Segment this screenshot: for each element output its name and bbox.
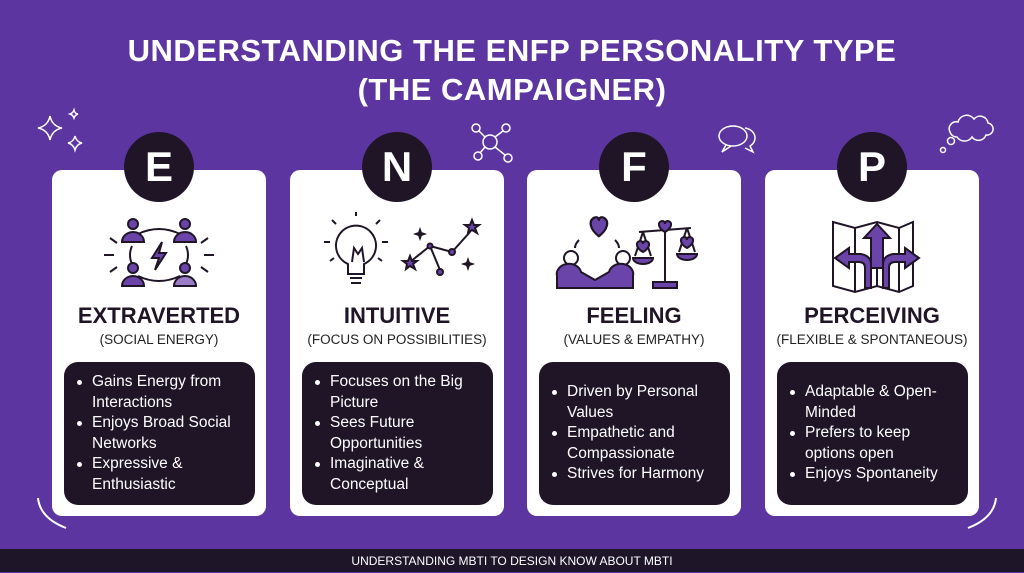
letter badge P: P (858, 143, 886, 190)
letter badge F: F (621, 143, 647, 190)
icon: map with branching arrows (832, 220, 921, 293)
icon: people energy (104, 218, 214, 287)
trait list: Strives for Harmony (567, 465, 704, 482)
trait list (302, 362, 493, 505)
trait list: Empathetic and Compassionate (567, 424, 675, 462)
trait list: Expressive & Enthusiastic (92, 455, 182, 492)
panel: extraverted (52, 170, 266, 516)
title (128, 33, 896, 107)
trait list: Sees Future Opportunities (330, 414, 422, 452)
letter badge F (599, 132, 669, 202)
panel: feeling: (VALUES & EMPATHY) (563, 332, 705, 347)
footer: UNDERSTANDING MBTI TO DESIGN KNOW ABOUT MBTI (351, 554, 673, 568)
panel: perceiving (765, 170, 979, 516)
letter badge E (124, 132, 194, 202)
panel: extraverted: (SOCIAL ENERGY) (100, 332, 218, 347)
decorative icons: sparkles, network, speech, thought (38, 108, 994, 163)
title: UNDERSTANDING THE ENFP PERSONALITY TYPE (128, 33, 896, 68)
trait list (64, 362, 255, 505)
heading: INTUITIVE (344, 303, 450, 328)
panel: intuitive: (FOCUS ON POSSIBILITIES) (307, 332, 487, 347)
letter badge P (837, 132, 907, 202)
footer (0, 549, 1024, 572)
trait list: Enjoys Broad Social Networks (92, 414, 231, 452)
trait list: Gains Energy from Interactions (92, 373, 221, 410)
title: (THE CAMPAIGNER) (358, 72, 666, 107)
panel: feeling (527, 170, 741, 516)
heading: FEELING (586, 303, 682, 328)
letter badge N: N (382, 143, 412, 190)
letter badge N (362, 132, 432, 202)
panel: intuitive (290, 170, 504, 516)
letter badge E: E (145, 143, 173, 190)
trait list: Imaginative & Conceptual (330, 455, 424, 492)
trait list (539, 362, 730, 505)
trait list (777, 362, 968, 505)
corner arcs (37, 498, 997, 529)
trait list: Prefers to keep options open (805, 424, 910, 462)
icon: bulb and constellation (324, 212, 482, 284)
trait list: Driven by Personal Values (567, 383, 698, 421)
trait list: Adaptable & Open-Minded (805, 383, 937, 421)
icon: hearts and scale (556, 216, 698, 289)
heading: EXTRAVERTED (78, 303, 240, 328)
panel: perceiving: (FLEXIBLE & SPONTANEOUS) (776, 332, 968, 347)
heading: PERCEIVING (804, 303, 940, 328)
trait list: Enjoys Spontaneity (805, 465, 938, 482)
trait list: Focuses on the Big Picture (330, 373, 463, 410)
